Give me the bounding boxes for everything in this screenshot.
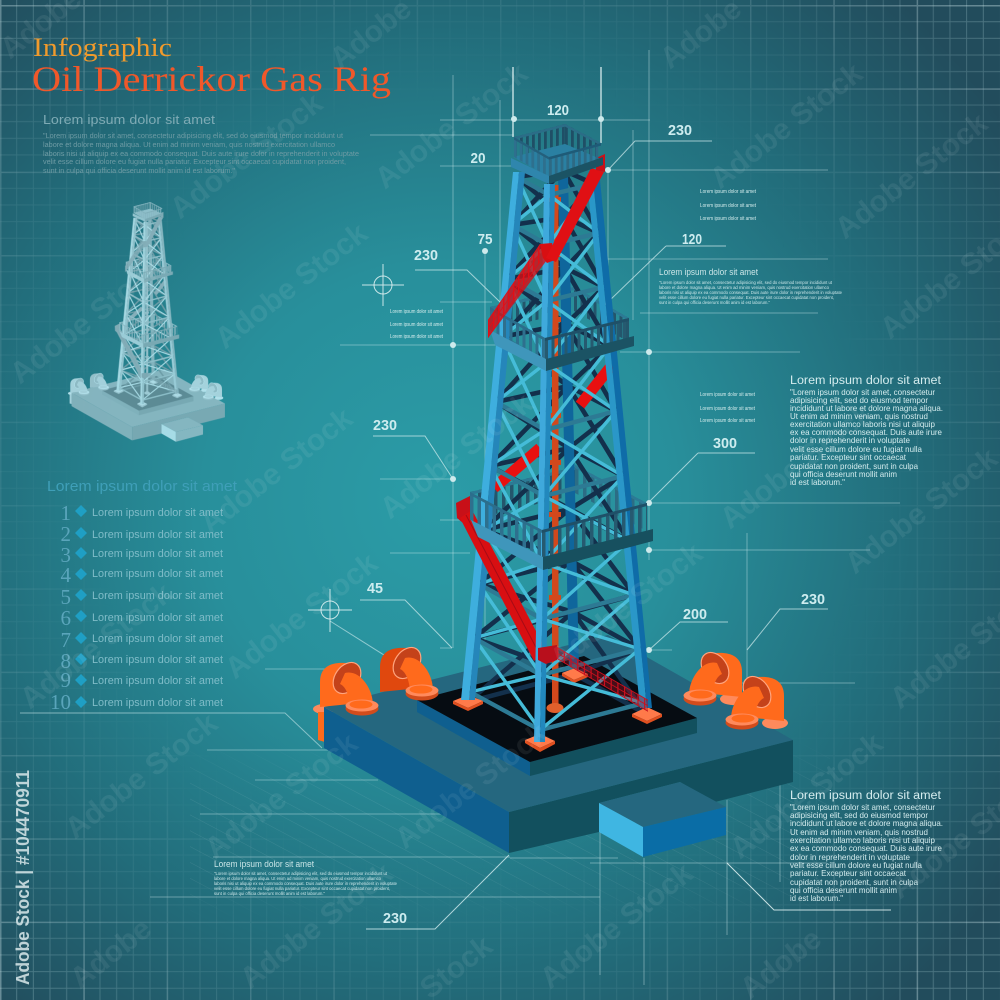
stock watermark pattern: Adobe Stock [14,576,179,716]
stock watermark pattern: Adobe Stock [219,546,384,686]
title: Oil Derrickor Gas Rig [32,59,391,99]
stock watermark pattern: Adobe Stock [199,726,364,866]
numbered list: 5 [60,585,71,609]
dimension: 230 bottom: 230 [383,910,407,927]
text block: right: exercitation ullamco laboris nisi ut aliquip [790,420,935,429]
small text block: upper right: Lorem ipsum dolor sit amet [659,267,758,277]
dimension: 120 right: 120 [682,231,702,248]
stock watermark pattern: Adobe Stock [59,706,224,846]
numbered list: Lorem ipsum dolor sit amet [92,507,223,519]
stock watermark pattern: Adobe Stock [839,441,1000,581]
small text block: upper right: laboris nisi ut aliquip ex ea commodo consequat. Duis aute irure dolor in reprehenderit in voluptate [659,290,843,295]
stock watermark pattern: Adobe Stock [369,56,534,196]
vertical stock id: Adobe Stock | #104470911 [13,770,33,985]
small labels right: Lorem ipsum dolor sit amet [700,392,756,398]
text block: right: "Lorem ipsum dolor sit amet, consectetur [790,388,935,397]
text block: right: ex ea commodo consequat. Duis aute irure [790,428,942,437]
text block: right [790,375,943,487]
small labels top right: Lorem ipsum dolor sit amet [700,203,757,209]
text block: lower right: adipisicing elit, sed do eiusmod tempor [790,811,928,820]
numbered list: 6 [60,606,71,630]
small labels right: Lorem ipsum dolor sit amet [700,418,756,424]
stock watermark pattern: Adobe Stock [164,86,329,226]
dimension: 230 lower right [747,591,828,650]
stock watermark pattern: Adobe Stock [704,56,869,196]
small text block: upper right: velit esse cillum dolore eu fugiat nulla pariatur. Excepteur sint occaecat cupidatat non proident, [659,295,834,300]
small text block: bottom left: velit esse cillum dolore eu fugiat nulla pariatur. Excepteur sint occaecat cupidatat non proident, [214,886,390,891]
small text block: bottom left: Lorem ipsum dolor sit amet [214,859,314,869]
small labels left: Lorem ipsum dolor sit amet [390,309,444,315]
leader: bottom right [727,863,891,910]
small text block: upper right: labore et dolore magna aliqua. Ut enim ad minim veniam, quis nostrud exercitation ullamco [659,285,830,290]
numbered list: 2 [60,522,71,546]
stock watermark pattern: Adobe Stock [724,726,889,866]
connector dots [450,342,652,653]
dimension: 20: 20 [470,150,486,167]
stock watermark pattern: Adobe Stock [829,106,994,246]
numbered list: 7 [60,628,71,652]
numbered list: Lorem ipsum dolor sit amet [92,529,223,541]
dimension: 75 [478,231,492,254]
text block: lower right: ex ea commodo consequat. Duis aute irure [790,844,942,853]
small ghost rig [68,202,225,442]
stock watermark pattern: Adobe Stock [389,716,554,856]
text block: right: velit esse cillum dolore eu fugiat nulla [790,445,922,454]
small text block: upper right [659,267,843,305]
text block: lower right: Lorem ipsum dolor sit amet [790,790,942,802]
dimension: 300: 300 [713,435,737,452]
text block: right: id est laborum." [790,478,845,487]
numbered list: Lorem ipsum dolor sit amet [92,633,223,645]
dimension: 200 [649,606,728,650]
text block: lower right: cupidatat non proident, sunt in culpa [790,878,918,887]
title: Infographic [33,33,172,62]
main oil rig illustration [313,124,793,857]
crosshair lower [308,589,352,632]
text block: lower right: dolor in reprehenderit in voluptate [790,853,910,862]
dimension: 230 bottom [366,855,509,929]
numbered list: Lorem ipsum dolor sit amet [92,590,223,602]
numbered list: 1 [60,501,71,525]
title [32,33,391,99]
text block: lower right: "Lorem ipsum dolor sit amet, consectetur [790,803,935,812]
dimension: 230 top right [605,122,712,173]
dimension: 45 [360,580,452,648]
dimension: 120 top [511,67,604,143]
intro text block: sunt in culpa qui officia deserunt mollit anim id est laborum." [43,168,236,175]
dimension: 120 right [605,231,726,306]
small labels left: Lorem ipsum dolor sit amet [390,322,444,328]
text block: right: cupidatat non proident, sunt in culpa [790,462,918,471]
small labels left [390,309,444,340]
text block: lower right: incididunt ut labore et dolore magna aliqua. [790,819,943,828]
small text block: bottom left: labore et dolore magna aliqua. Ut enim ad minim veniam, quis nostrud exercitation ullamco [214,876,382,881]
crosshair upper [362,264,404,306]
stock watermark pattern: Adobe Stock [544,536,709,676]
small text block: bottom left: "Lorem ipsum dolor sit amet, consectetur adipisicing elit, sed do eiusmod tempor incididunt ut [214,871,388,876]
stock watermark pattern: Adobe [64,912,158,996]
text block: lower right: pariatur. Excepteur sint occaecat [790,869,907,878]
numbered list: 9 [60,668,71,692]
numbered list: Lorem ipsum dolor sit amet [92,568,223,580]
dimension: 230 upper left [414,247,500,302]
text block: right: pariatur. Excepteur sint occaecat [790,453,907,462]
dimension: 230 lower right: 230 [801,591,825,608]
numbered list [47,479,237,714]
small text block: upper right: sunt in culpa qui officia deserunt mollit anim id est laborum." [659,300,771,305]
dimension: 230 upper left: 230 [414,247,438,264]
numbered list: Lorem ipsum dolor sit amet [92,548,223,560]
small text block: bottom left: sunt in culpa qui officia deserunt mollit anim id est laborum." [214,891,326,896]
small labels right: Lorem ipsum dolor sit amet [700,406,756,412]
intro text block: "Lorem ipsum dolor sit amet, consectetur adipisicing elit, sed do eiusmod tempor incididunt ut [43,133,343,140]
small labels top right: Lorem ipsum dolor sit amet [700,189,757,195]
dimension: 230 mid left: 230 [373,417,397,434]
intro text block: velit esse cillum dolore eu fugiat nulla pariatur. Excepteur sint occaecat cupidatat non proident, [43,159,346,166]
text block: right: adipisicing elit, sed do eiusmod tempor [790,396,928,405]
dimension: 300 [649,435,755,502]
small labels left: Lorem ipsum dolor sit amet [390,334,444,340]
small labels top right: Lorem ipsum dolor sit amet [700,216,757,222]
text block: lower right: velit esse cillum dolore eu fugiat nulla [790,861,922,870]
numbered list: Lorem ipsum dolor sit amet [92,697,223,709]
small text block: bottom left: laboris nisi ut aliquip ex ea commodo consequat. Duis aute irure dolor in reprehenderit in voluptate [214,881,398,886]
intro text block [43,112,359,175]
intro text block: Lorem ipsum dolor sit amet [43,112,215,127]
stock watermark pattern: Adobe Stock [374,386,539,526]
text block: lower right: id est laborum." [790,894,843,903]
text block: right: qui officia deserunt mollit anim [790,470,897,479]
intro text block: laboris nisi ut aliquip ex ea commodo consequat. Duis aute irure dolor in reprehenderit in voluptate [43,151,359,158]
numbered list: 8 [60,649,71,673]
diagonal hatching [190,762,830,902]
stock watermark pattern: Adobe Stock [194,401,359,541]
dimension: 120 top: 120 [547,102,569,119]
numbered list: 4 [60,563,72,587]
small text block: upper right: "Lorem ipsum dolor sit amet, consectetur adipisicing elit, sed do eiusmod tempor incididunt ut [659,280,833,285]
intro text block: labore et dolore magna aliqua. Ut enim ad minim veniam, quis nostrud exercitation ullamco [43,142,335,149]
dimension: 75: 75 [478,231,492,248]
text block: lower right [790,790,943,903]
dimension: 200: 200 [683,606,707,623]
stock watermark pattern: Adobe Stock [4,251,169,391]
list heading: Lorem ipsum dolor sit amet [47,479,237,495]
stock watermark pattern: Adobe Stock [234,856,399,996]
small labels top right [700,189,757,222]
text block: lower right: qui officia deserunt mollit anim [790,886,897,895]
text block: right: Ut enim ad minim veniam, quis nostrud [790,412,928,421]
text block: right: incididunt ut labore et dolore magna aliqua. [790,404,943,413]
text block: right: Lorem ipsum dolor sit amet [790,375,942,387]
dimension: 230 top right: 230 [668,122,692,139]
stock watermark pattern: Adobe Stock [714,396,879,536]
numbered list: Lorem ipsum dolor sit amet [92,654,223,666]
dimension: 230 mid left [373,417,453,479]
stock watermark pattern: Adobe Stock [209,216,374,356]
small text block: bottom left [214,859,398,896]
dimension: 45: 45 [367,580,383,597]
numbered list: 3 [60,543,71,567]
text block: lower right: exercitation ullamco laboris nisi ut aliquip [790,836,935,845]
numbered list: 10 [50,690,71,714]
small labels right [700,392,756,424]
text block: lower right: Ut enim ad minim veniam, quis nostrud [790,828,928,837]
numbered list: Lorem ipsum dolor sit amet [92,675,223,687]
stock watermark pattern: Adobe Stock [534,856,699,996]
numbered list: Lorem ipsum dolor sit amet [92,612,223,624]
text block: right: dolor in reprehenderit in voluptate [790,436,910,445]
